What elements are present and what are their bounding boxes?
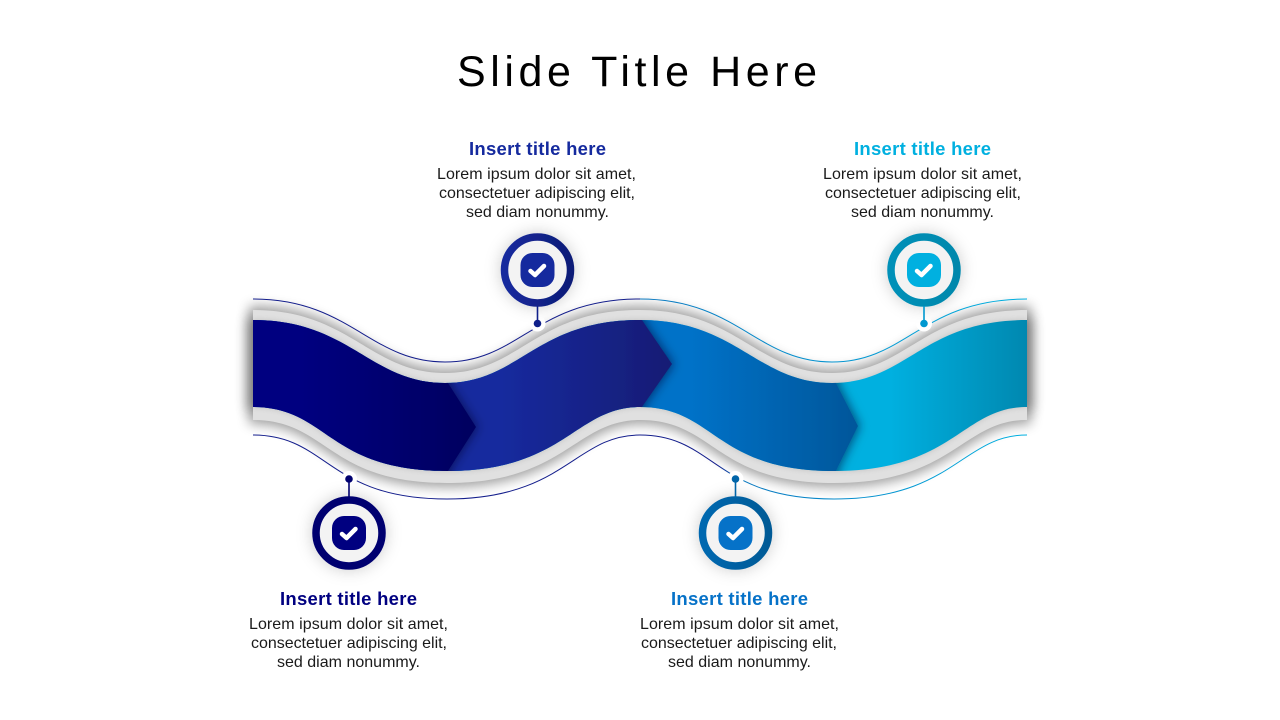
text block 1: consectetuer adipiscing elit,	[251, 635, 447, 652]
right end shadow	[1021, 318, 1033, 410]
text block 2: Insert title here	[469, 138, 606, 159]
text block 3: Lorem ipsum dolor sit amet,	[640, 616, 839, 633]
marker 2	[504, 237, 570, 332]
back band	[253, 310, 1027, 483]
text block 3: Insert title here	[671, 588, 808, 609]
text block 2: sed diam nonummy.	[466, 204, 609, 221]
text block 4: consectetuer adipiscing elit,	[825, 185, 1021, 202]
wave ribbon	[200, 250, 1033, 520]
ribbon segments	[253, 320, 1027, 471]
text block 1: sed diam nonummy.	[277, 654, 420, 671]
text block 1	[249, 588, 448, 671]
text block 1: Lorem ipsum dolor sit amet,	[249, 616, 448, 633]
marker 1	[316, 471, 382, 566]
bottom outline	[253, 435, 1027, 499]
text block 2	[437, 138, 636, 221]
text block 2: Lorem ipsum dolor sit amet,	[437, 166, 636, 183]
top outline	[253, 299, 1027, 362]
title: Slide Title Here	[457, 48, 817, 96]
text block 1: Insert title here	[280, 588, 417, 609]
text block 3: consectetuer adipiscing elit,	[641, 635, 837, 652]
segment 3	[400, 320, 866, 471]
ribbon shadow	[253, 320, 1027, 471]
text block 2: consectetuer adipiscing elit,	[439, 185, 635, 202]
text block 3: sed diam nonummy.	[668, 654, 811, 671]
back band shadow	[253, 310, 1027, 483]
segment 4	[255, 320, 1027, 471]
segment 1	[253, 320, 482, 471]
text block 4: Insert title here	[854, 138, 991, 159]
segment 2	[255, 320, 678, 471]
text block 4	[823, 138, 1022, 221]
marker 3	[702, 471, 768, 566]
marker 4	[891, 237, 957, 332]
text block 4: sed diam nonummy.	[851, 204, 994, 221]
left end shadow	[247, 318, 259, 410]
text block 4: Lorem ipsum dolor sit amet,	[823, 166, 1022, 183]
text block 3	[640, 588, 839, 671]
